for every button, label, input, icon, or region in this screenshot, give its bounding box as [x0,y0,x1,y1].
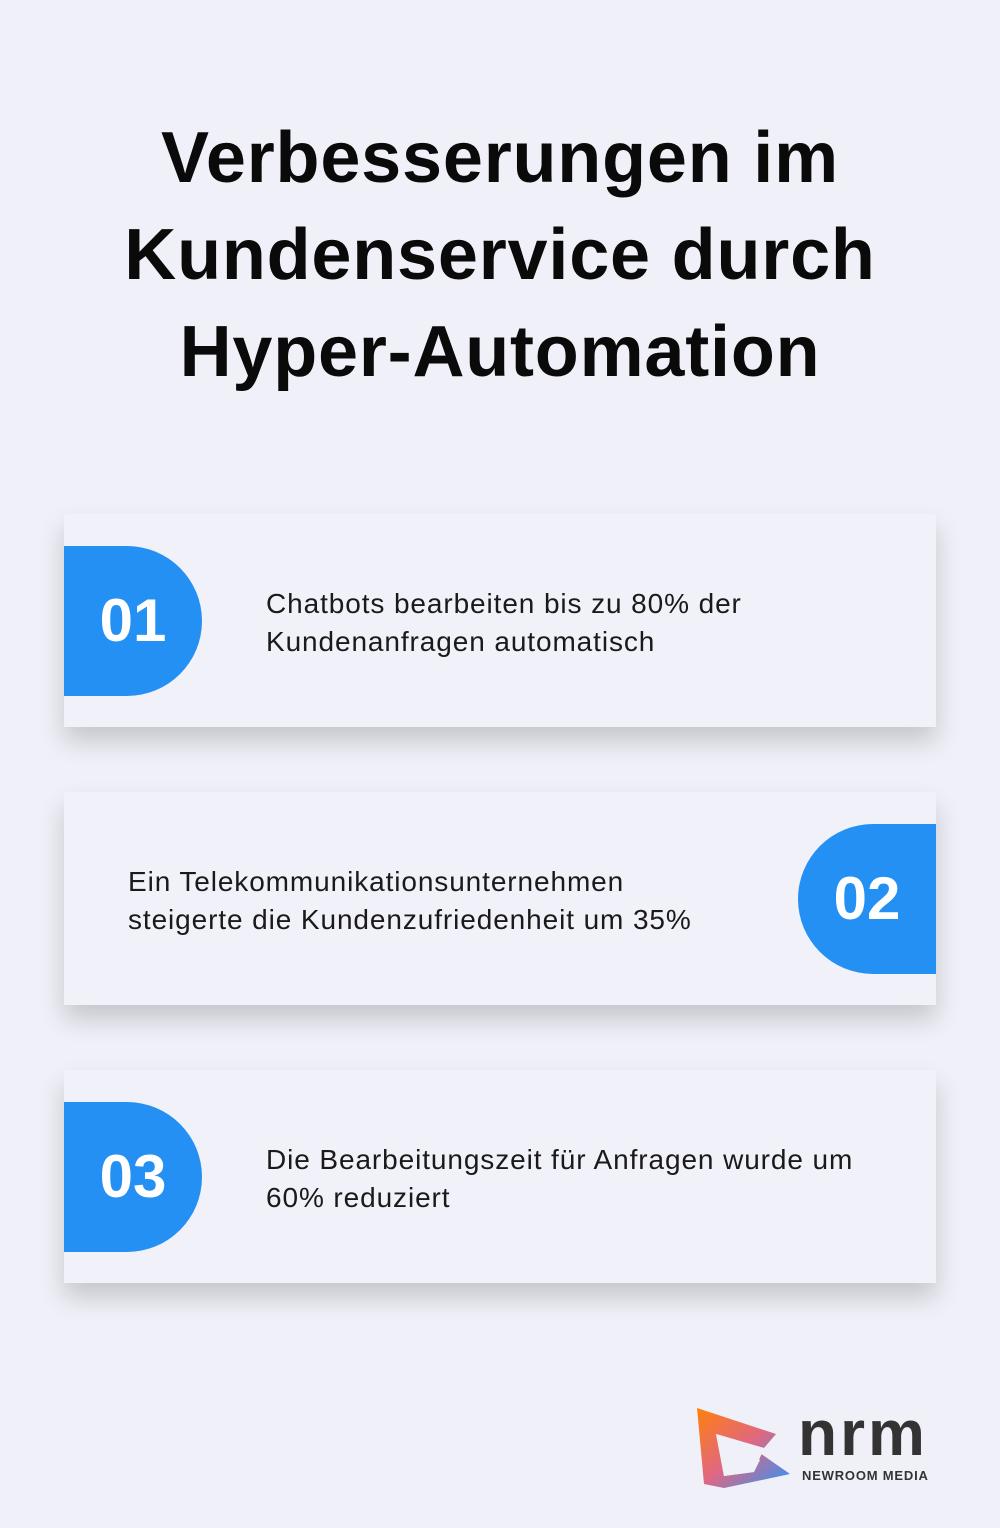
text 03: Die Bearbeitungszeit für Anfragen wurde um [266,1144,853,1175]
badge 02: 02 [834,865,900,932]
badge 03: 03 [100,1143,166,1210]
text 02 [128,866,692,935]
text 02: steigerte die Kundenzufriedenheit um 35% [128,904,692,935]
logo [697,1397,929,1488]
text 01 [266,588,742,657]
title [124,118,876,392]
text 02: Ein Telekommunikationsunternehmen [128,866,624,897]
text 01: Kundenanfragen automatisch [266,626,655,657]
badge 03 [64,1102,202,1252]
badge 01: 01 [100,587,166,654]
text 03 [266,1144,853,1213]
panel: card 01 [64,514,936,727]
title: Verbesserungen im [161,118,839,198]
logo text: nrm [798,1397,928,1469]
icon: logo mark [697,1408,790,1488]
panel: card 03 [64,1070,936,1283]
badge 02 [798,824,936,974]
title: Hyper-Automation [180,312,820,392]
badge 01 [64,546,202,696]
text 01: Chatbots bearbeiten bis zu 80% der [266,588,742,619]
text 03: 60% reduziert [266,1182,450,1213]
logo: NEWROOM MEDIA [802,1468,929,1483]
panel: card 02 [64,792,936,1005]
title: Kundenservice durch [124,215,876,295]
